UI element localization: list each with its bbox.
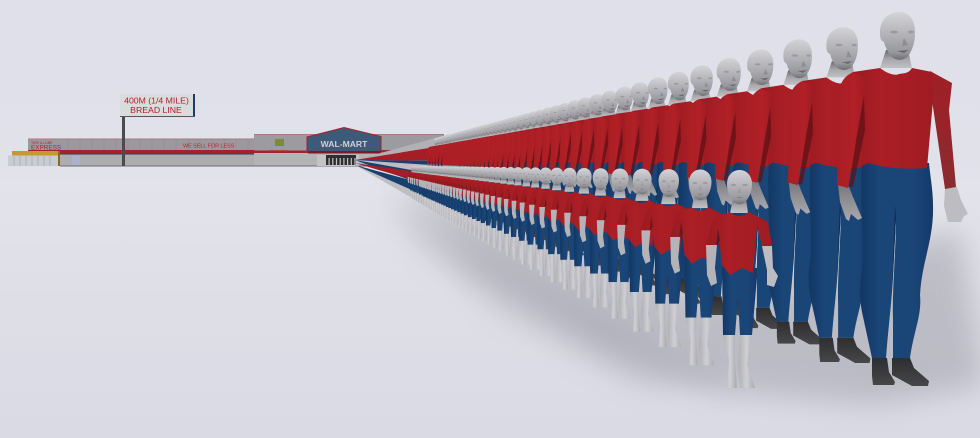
wal-mart roof sign xyxy=(307,128,381,154)
adult bands xyxy=(355,134,450,195)
tire and lube express sign xyxy=(31,141,61,152)
billboard: 400m bread line: BREAD LINE xyxy=(130,105,182,115)
tire and lube express sign: TIRE & LUBE xyxy=(31,141,53,145)
billboard post xyxy=(122,116,125,166)
small red store label: LIFE CENTER xyxy=(268,149,288,153)
child bands xyxy=(355,160,450,220)
tire and lube express sign: EXPRESS xyxy=(31,144,61,152)
floor shadow below the children's feet xyxy=(385,195,730,385)
queue of children in front of the adults xyxy=(408,166,778,388)
store left wing xyxy=(28,138,254,166)
wal-mart roof sign: WAL-MART xyxy=(321,139,368,149)
converging queue bands at the vanishing point xyxy=(355,134,450,220)
billboard: 400m bread line xyxy=(120,94,195,117)
store centre block xyxy=(254,134,445,166)
store building xyxy=(8,94,445,166)
we sell for less slogan: WE SELL FOR LESS xyxy=(183,144,235,150)
queue of adults in red shirts and blue trousers xyxy=(427,12,968,386)
billboard: 400m bread line: 400M (1/4 MILE) xyxy=(124,96,189,106)
garden centre awning xyxy=(8,151,60,166)
floor shadow of the queue xyxy=(400,185,980,405)
green store sign xyxy=(275,139,284,146)
